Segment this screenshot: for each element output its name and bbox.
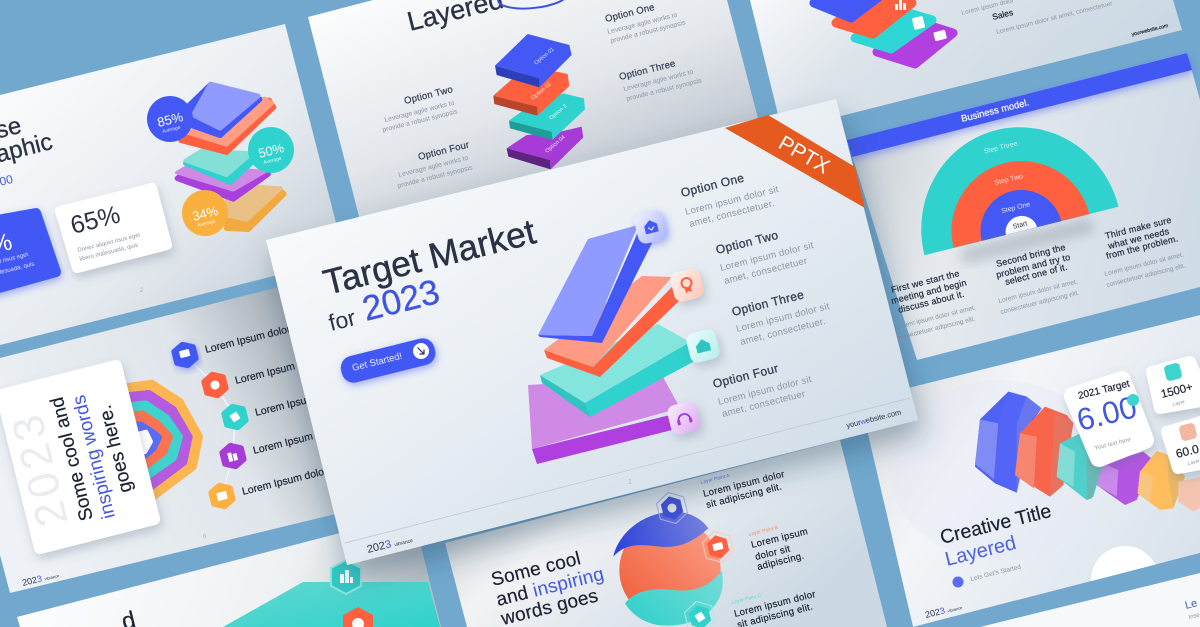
text: Option Four: amet, consectetuer (721, 389, 806, 420)
text: Option Four: Lorem ipsum dolor sit (717, 374, 813, 408)
card: 1500+: Layer (1172, 399, 1186, 408)
text: layer point A: Lorem ipsum dolor (702, 469, 786, 500)
list: bullet labels: Lorem Ipsum dolor sit (252, 421, 353, 457)
card: slogan: 2023 (2, 405, 78, 531)
chart: semicircular steps: Step One (1001, 201, 1031, 215)
label: Option Two: Leverage agile works to (384, 100, 455, 124)
card: 65 percent stat: libero malesuada, quis (79, 243, 139, 263)
card: slogan: Some cool and (47, 395, 98, 523)
icon: home tile (685, 328, 721, 364)
column: second step: consectetuer adipiscing elit. (1000, 290, 1080, 316)
icon: gold hexagon bullet (210, 483, 234, 509)
text: Option One (679, 171, 780, 230)
text: Option Two: Lorem ipsum dolor sit (719, 240, 815, 274)
card: 60.0 (1167, 418, 1200, 468)
text: Option Three (730, 287, 831, 348)
label: Option One: Leverage agile works to (607, 12, 678, 36)
heading: slogan: Some cool (489, 548, 583, 591)
column: second step: problem and try to (995, 252, 1071, 280)
label: Option Three: Leverage agile works to (623, 69, 694, 93)
badge: 85 percent: Average (162, 125, 181, 135)
ribbon: PPTX (725, 115, 865, 208)
icon: envelope tile (633, 209, 669, 245)
card: blue stat (0, 213, 56, 296)
card: 65 percent stat (60, 188, 167, 268)
label: Option Three: provide a robust synopsis (626, 77, 703, 103)
card: 2021 target (1073, 378, 1145, 458)
text: layer point C: Layer Point C (731, 593, 762, 606)
footer: website: yourwebsite.com (1131, 23, 1169, 38)
column: second step: Second bring the (995, 242, 1067, 269)
panel: main slide Target Market (266, 99, 918, 565)
icon: red hexagon marker (701, 528, 735, 566)
column: second step (995, 242, 1080, 316)
icon: teal hexagon marker (683, 598, 717, 627)
header bar: Business model (847, 53, 1192, 157)
chart: hexagon prisms (975, 392, 1200, 512)
page number: 6 (203, 534, 207, 540)
chart: layered sphere (613, 512, 723, 626)
icon: headset tile (666, 400, 702, 436)
label: Option Three: Option Three (618, 58, 677, 83)
heading: infographic title fragment (0, 112, 55, 190)
badge: 34 percent: 34% (191, 203, 220, 224)
shape: teal plateau (223, 582, 440, 627)
chart: semicircular steps: Start (1012, 220, 1028, 231)
panel: bottom-right corner slide (980, 573, 1200, 627)
column: third step: from the problem. (1105, 233, 1179, 261)
title: Target Market (319, 211, 540, 303)
column: first step: meeting and begin (890, 277, 968, 306)
text: Sales: Lorem ipsum dolor sit amet, consectetuer (996, 0, 1114, 36)
button: Get Started (338, 336, 438, 385)
text: Option Two: Option Two (714, 228, 780, 257)
column: first step: Lorem ipsum dolor sit amet, (896, 304, 977, 331)
panel: left-middle slide with concentric shapes (0, 276, 355, 593)
text: layer point C: Lorem ipsum dolor (733, 589, 817, 620)
icon: teal hexagon bullet (223, 404, 247, 430)
logo: 2023 vibrance (366, 533, 414, 556)
card: 65 percent stat: Donec aliquet risus eget (77, 232, 141, 254)
icon: purple hexagon bullet (221, 443, 245, 469)
icon: red hexagon bullet (203, 372, 227, 398)
list: bullet labels: Lorem Ipsum dolor sit (204, 320, 305, 356)
title: for (326, 304, 359, 336)
badge: 34 percent: Average (197, 219, 216, 229)
list: bullet labels (204, 320, 355, 498)
heading: Layered (404, 0, 569, 37)
column: first step: First we start the (890, 268, 961, 295)
text: Option Three: Option Three (730, 287, 806, 319)
panel: top-middle slide with isometric stack (308, 0, 772, 240)
text: layer point A: Layer Point A (700, 473, 731, 486)
list: bullet labels: Lorem Ipsum dolor sit (234, 351, 335, 387)
heading: slogan: and inspiring (494, 564, 606, 611)
icon: blue hexagon marker (655, 489, 689, 527)
text: Option Three: amet, consectetuer. (739, 316, 827, 348)
chart: blue top layer (538, 225, 652, 343)
cta: Lets Get's Started: Lets Get's Started (970, 564, 1022, 583)
text: Option Four: Option Four (711, 361, 780, 391)
panel: top-left slide with percentage layers (0, 24, 345, 345)
column: third step: consectetuer adipiscing elit. (1106, 263, 1186, 289)
label: Option Four: Option Four (417, 140, 471, 163)
title: 2023 (359, 272, 443, 329)
icon: teal hexagon (331, 560, 361, 594)
connector between bullets (185, 355, 235, 496)
column: third step: what we needs (1106, 226, 1171, 251)
text fragment: Le (1184, 597, 1199, 612)
label: Option Four: provide a robust synopsis (397, 164, 474, 190)
panel: bottom-middle slide with sphere (445, 440, 887, 627)
card: 60.0: 60.0 (1174, 442, 1200, 461)
label: Option Four (397, 140, 474, 190)
label: Option Three (618, 58, 703, 103)
ribbon: PPTX: PPTX (774, 131, 834, 179)
text: layer point B: dolor sit (754, 544, 792, 563)
text: Sales: Sales (991, 7, 1014, 22)
panel: bottom-left slide with teal shape (17, 514, 441, 627)
header bar: Business model: Business model. (960, 97, 1030, 125)
footer rule (345, 398, 910, 543)
column: third step: Lorem ipsum dolor sit amet, (1104, 251, 1185, 278)
text: Option Four (711, 361, 813, 420)
icon: red hexagon (343, 607, 373, 627)
chart: stacked percentage layers (177, 84, 284, 229)
column: first step: consectetuer adipiscing elit. (896, 316, 976, 342)
label: Option Two: Option Two (403, 84, 454, 107)
chart: concentric rainbow layers (123, 383, 199, 497)
chart: semicircular steps (899, 106, 1119, 255)
chart: semicircular steps: Step Three (983, 140, 1019, 156)
badge: 50 percent: Average (263, 156, 282, 166)
chart: rounded layer cards (814, 0, 953, 64)
chart: isometric option blocks: Option 02 (530, 82, 553, 102)
chart: purple bottom layer (528, 377, 680, 464)
chart: isometric option blocks: Option 01 (533, 47, 556, 67)
card: 1500+: 1500+ (1160, 381, 1194, 401)
card: 2021 target: Your text here (1094, 437, 1132, 452)
heading: Creative Title Layered (940, 506, 1051, 566)
card: 2021 target: 6.00 (1073, 389, 1140, 438)
label: Option One: Option One (604, 2, 656, 25)
label: Option Four: Leverage agile works to (398, 155, 469, 179)
list: bullet labels: Lorem Ipsum dolor sit (254, 383, 355, 419)
panel: business model slide (847, 53, 1200, 360)
text: Option One: Lorem ipsum dolor sit (684, 184, 780, 218)
card: slogan: goes here. (95, 403, 137, 495)
text: Option One: Option One (679, 171, 746, 200)
heading: Creative Title Layered: Layered (943, 532, 1018, 571)
chart: teal layer (540, 324, 693, 417)
decor: pale lavender blob (890, 380, 1110, 560)
chart: isometric option blocks: Option 3 (548, 104, 568, 122)
text: Option Two: amet, consectetuer (723, 256, 808, 287)
column: first step (890, 268, 977, 342)
column: second step: select one of it. (1004, 262, 1069, 287)
icon: award tile (669, 267, 705, 303)
icon: blue hexagon bullet (173, 342, 197, 368)
card: slogan: inspiring words (69, 393, 120, 521)
text: Option Two (714, 228, 815, 287)
label: Option Two (382, 84, 459, 134)
logo: 2023 vibrance (924, 601, 964, 620)
page number: 2 (140, 288, 144, 294)
badge: 50 percent (248, 127, 294, 173)
badge: 85 percent (147, 96, 193, 142)
chart: isometric option blocks: Option 04 (544, 135, 567, 155)
button: Get Started: Get Started! (351, 351, 403, 374)
panel: bottom-right slide with hexagon prisms (860, 315, 1200, 627)
chart: salmon layer (544, 276, 680, 377)
column: third step: Third make sure (1104, 215, 1172, 241)
decor: white half circle (1091, 546, 1156, 582)
column: first step: discuss about it. (897, 289, 965, 315)
label: Option One: provide a robust synopsis (610, 19, 687, 45)
list: bullet labels: Lorem Ipsum dolor sit (241, 462, 342, 498)
label: Option One (604, 2, 687, 45)
column: second step: Lorem ipsum dolor sit amet, (998, 278, 1079, 305)
heading: Creative Title Layered: Creative Title (938, 500, 1054, 549)
label: Option Two: provide a robust synopsis (382, 108, 459, 134)
card: slogan (2, 366, 154, 548)
logo: 2023 vibrance (21, 569, 61, 588)
text: layer point B: adipiscing. (756, 551, 805, 573)
badge: 34 percent (182, 190, 228, 236)
text: Option One: amet, consectetuer. (688, 198, 776, 230)
heading: slogan (489, 548, 606, 627)
badge: 50 percent: 50% (257, 140, 286, 161)
text: Option Three: Lorem ipsum dolor sit (735, 301, 831, 335)
page number: 1 (628, 479, 632, 486)
text: layer point B (748, 525, 809, 573)
shadow under semicircle chart (960, 218, 1094, 264)
text: layer point A: sit adipiscing elit. (705, 481, 783, 511)
chart: isometric option blocks (493, 34, 585, 169)
cta: Lets Get's Started (952, 564, 1022, 588)
card: 65 percent stat: 65% (68, 201, 123, 240)
badge: 85 percent: 85% (156, 109, 185, 130)
panel: top-right slide with rounded layers (750, 0, 1182, 131)
text: layer point B: Layer Point B (748, 525, 779, 538)
footer: website: yourwebsite.com (845, 408, 902, 430)
text: layer point B: Lorem ipsum (750, 526, 809, 551)
card: 1500+ (1152, 362, 1200, 408)
card: 2021 target: 2021 Target (1077, 378, 1131, 402)
chart: semicircular steps: Step Two (994, 173, 1024, 187)
column: third step (1104, 215, 1186, 289)
